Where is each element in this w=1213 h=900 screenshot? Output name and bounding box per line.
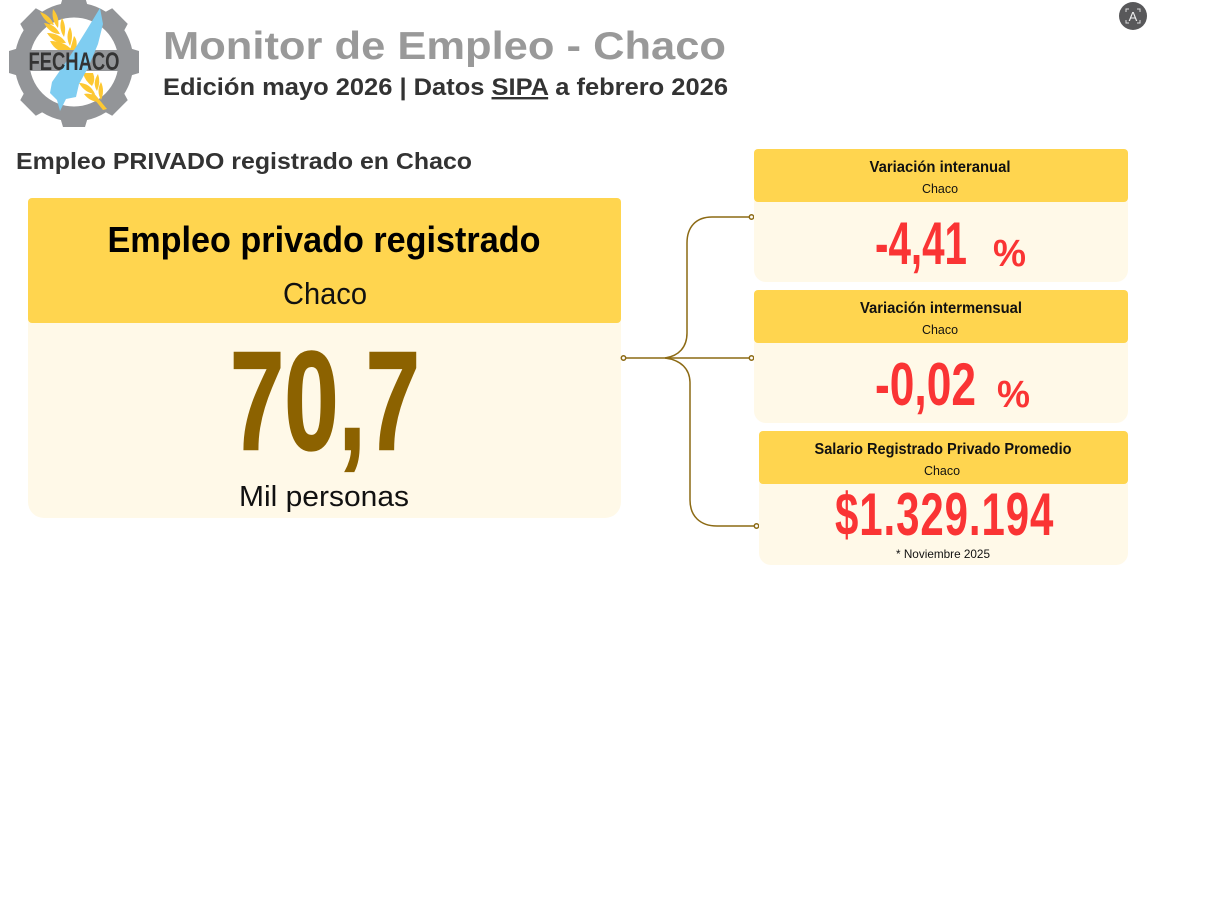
unit: Mil personas: [239, 481, 409, 513]
lower wheat: [79, 73, 107, 110]
percent: %: [993, 233, 1026, 275]
icon: translate button: A: [1129, 9, 1138, 24]
value: -0,02: [875, 351, 976, 418]
heading: Salario Registrado Privado Promedio: [814, 441, 1072, 458]
panel heading: Empleo privado registrado: [108, 219, 540, 260]
wing: [50, 8, 103, 111]
footnote: * Noviembre 2025: [896, 547, 990, 561]
region: Chaco: [924, 463, 960, 478]
header: [754, 149, 1128, 202]
panel: variación interanual: [754, 149, 1128, 282]
section heading: Empleo PRIVADO registrado en Chaco: [16, 148, 472, 174]
heading: Variación intermensual: [860, 300, 1022, 317]
main value: 70,7: [230, 322, 420, 480]
logo: FECHACO gear: [9, 0, 139, 127]
region: Chaco: [922, 181, 958, 196]
header: [754, 290, 1128, 343]
title: Monitor de Empleo - Chaco: [163, 25, 726, 68]
connector lines: [621, 215, 759, 528]
panel header: [28, 198, 621, 323]
value: $1.329.194: [835, 481, 1054, 548]
upper wheat: [40, 9, 77, 50]
subtitle: Edición mayo 2026 | Datos SIPA a febrero 2026: [163, 74, 728, 101]
header: [759, 431, 1128, 484]
percent: %: [997, 374, 1030, 416]
logo: FECHACO gear: FECHACO: [28, 48, 120, 76]
panel: salario registrado privado promedio: [759, 431, 1128, 565]
panel: empleo privado registrado: [28, 198, 621, 518]
panel region: Chaco: [283, 276, 367, 311]
icon: translate button: [1119, 2, 1147, 30]
heading: Variación interanual: [870, 159, 1010, 176]
panel: variación intermensual: [754, 290, 1128, 423]
value: -4,41: [875, 210, 967, 277]
region: Chaco: [922, 322, 958, 337]
